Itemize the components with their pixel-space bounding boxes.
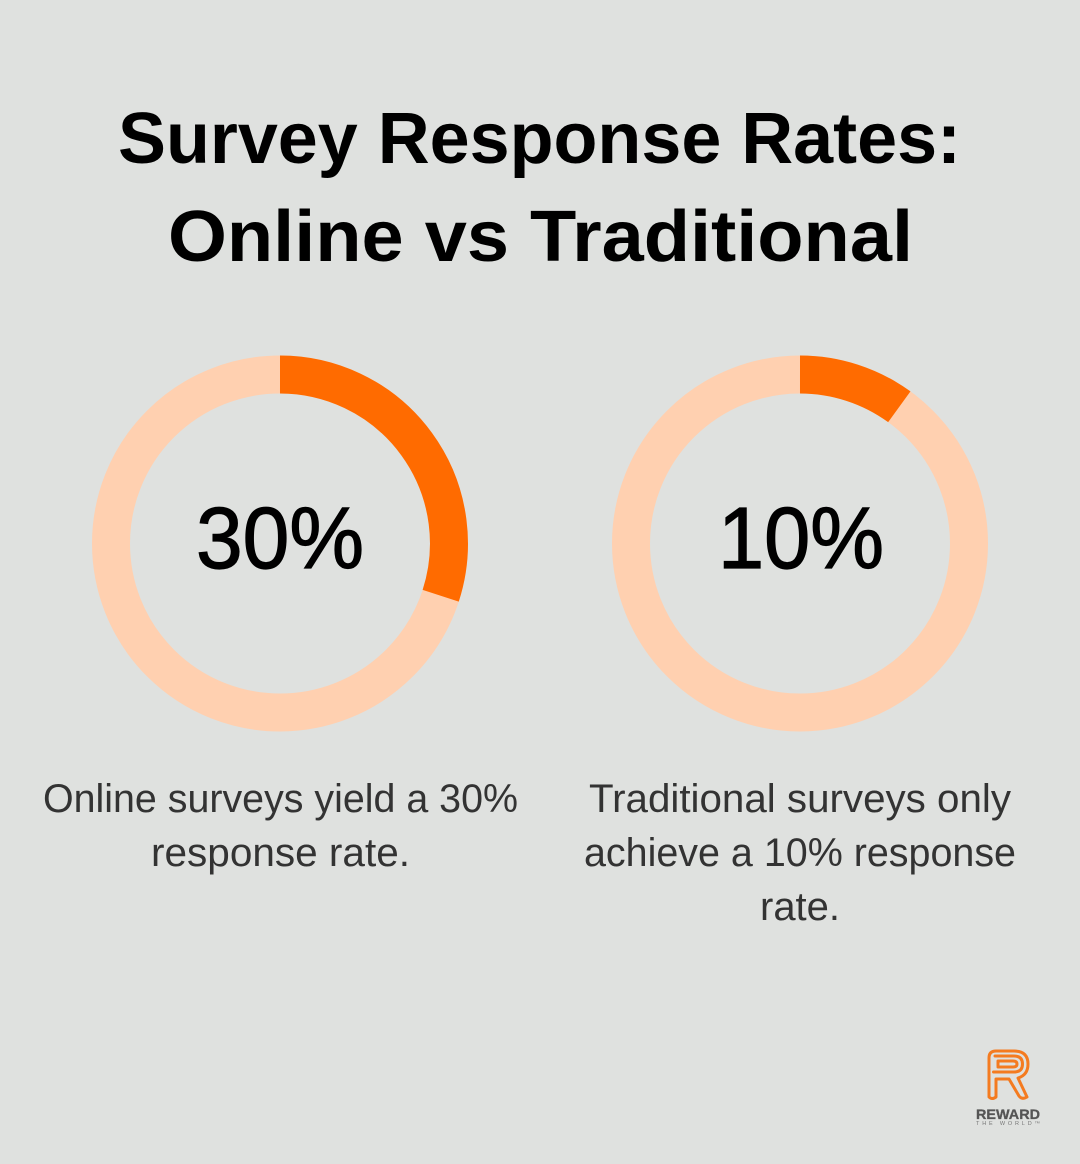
text: traditional description: Traditional surveys only — [589, 777, 1011, 821]
text: traditional description — [584, 777, 1016, 929]
title — [118, 99, 961, 277]
text: online description — [43, 777, 518, 875]
text: logo tagline: THE WORLD™ — [976, 1121, 1040, 1127]
title: Survey Response Rates: — [118, 99, 961, 179]
text: online description: Online surveys yield a 30% — [43, 777, 518, 821]
donut chart: 10% — [631, 374, 969, 712]
text: traditional description: achieve a 10% response — [584, 831, 1016, 875]
icon: R mark — [989, 1051, 1028, 1098]
donut chart: 30% — [111, 374, 449, 712]
value: 30%: 30% — [196, 490, 364, 587]
logo: Reward the World — [976, 1051, 1040, 1127]
text: logo wordmark: REWARD — [976, 1106, 1040, 1122]
panel: traditional surveys — [584, 374, 1016, 929]
text: online description: response rate. — [151, 831, 410, 875]
panel: online surveys — [43, 374, 518, 875]
text: traditional description: rate. — [760, 885, 840, 929]
value: 10%: 10% — [718, 490, 884, 587]
title: Online vs Traditional — [168, 197, 913, 277]
